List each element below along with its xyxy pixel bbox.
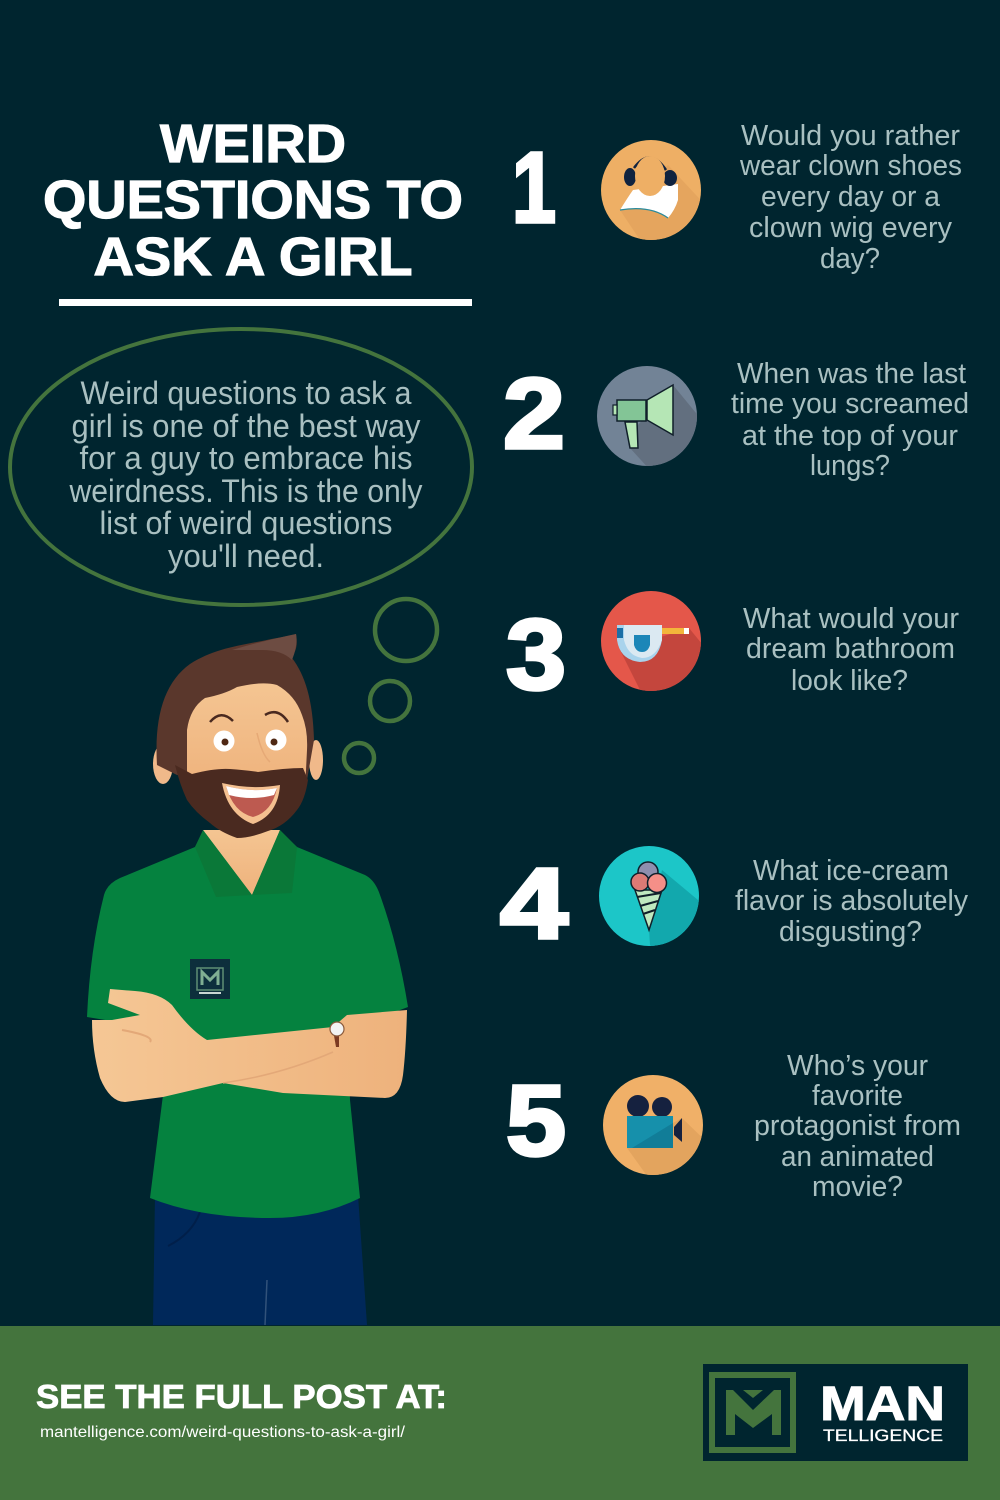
thought bubble with intro text: you'll need. [168,538,324,574]
thought bubble with intro text [10,329,472,605]
question 1: wear clown shoes [739,150,962,182]
footer call to action: SEE THE FULL POST AT: [36,1378,447,1415]
question 1: clown wig every [749,212,952,244]
trousers [153,1195,367,1325]
question 2: When was the last [737,358,966,390]
wristwatch [330,1022,344,1047]
question 3 [506,591,959,692]
question 2: 2 [503,358,565,470]
question 2 [503,358,969,482]
question 4: What ice-cream [753,855,949,887]
question 1: day? [820,243,880,275]
question 1: Would you rather [741,120,960,152]
question 1 [512,120,962,275]
thought bubble with intro text: weirdness. This is the only [69,473,422,509]
title: ASK A GIRL [94,227,412,287]
brand logo [703,1364,968,1461]
shirt logo badge [190,959,230,999]
question 1: every day or a [761,181,941,213]
question 4: flavor is absolutely [735,885,968,917]
question 3: dream bathroom [746,633,955,665]
question 4: 4 [500,848,568,960]
question 5 [506,1050,961,1203]
icon: film camera [603,1075,703,1175]
question 3: 3 [506,599,566,711]
title [43,114,463,287]
thought bubble with intro text: girl is one of the best way [72,408,420,444]
shirt [87,830,408,1218]
title: WEIRD [160,114,346,174]
icon: megaphone [597,366,697,466]
icon: ice-cream cone [599,846,699,946]
title: QUESTIONS TO [43,170,463,230]
question 4: disgusting? [779,916,922,948]
question 3: look like? [791,665,908,697]
question 4 [500,846,968,947]
question 5: 5 [506,1065,566,1177]
question 1: 1 [512,132,556,244]
footer band [0,1326,1000,1500]
crossed arms [92,989,407,1102]
thought bubble with intro text: list of weird questions [100,505,392,541]
head [153,634,323,838]
thought bubble trail [344,599,437,773]
question 2: at the top of your [742,420,958,452]
question 5: an animated [781,1141,934,1173]
question 2: lungs? [810,450,890,482]
question 2: time you screamed [731,388,969,420]
thought bubble with intro text: for a guy to embrace his [80,440,412,476]
question 5: protagonist from [754,1110,961,1142]
brand logo: TELLIGENCE [823,1426,943,1445]
question 5: Who’s your [787,1050,928,1082]
character illustration [87,634,408,1325]
footer url: mantelligence.com/weird-questions-to-ask-a-girl/ [40,1424,406,1441]
icon: person with headset [601,140,701,240]
thought bubble with intro text: Weird questions to ask a [80,375,412,411]
question 3: What would your [743,603,959,635]
question 5: movie? [812,1171,903,1203]
brand logo: MAN [820,1378,945,1431]
icon: bathroom fixture [601,591,701,691]
question 5: favorite [812,1080,903,1112]
